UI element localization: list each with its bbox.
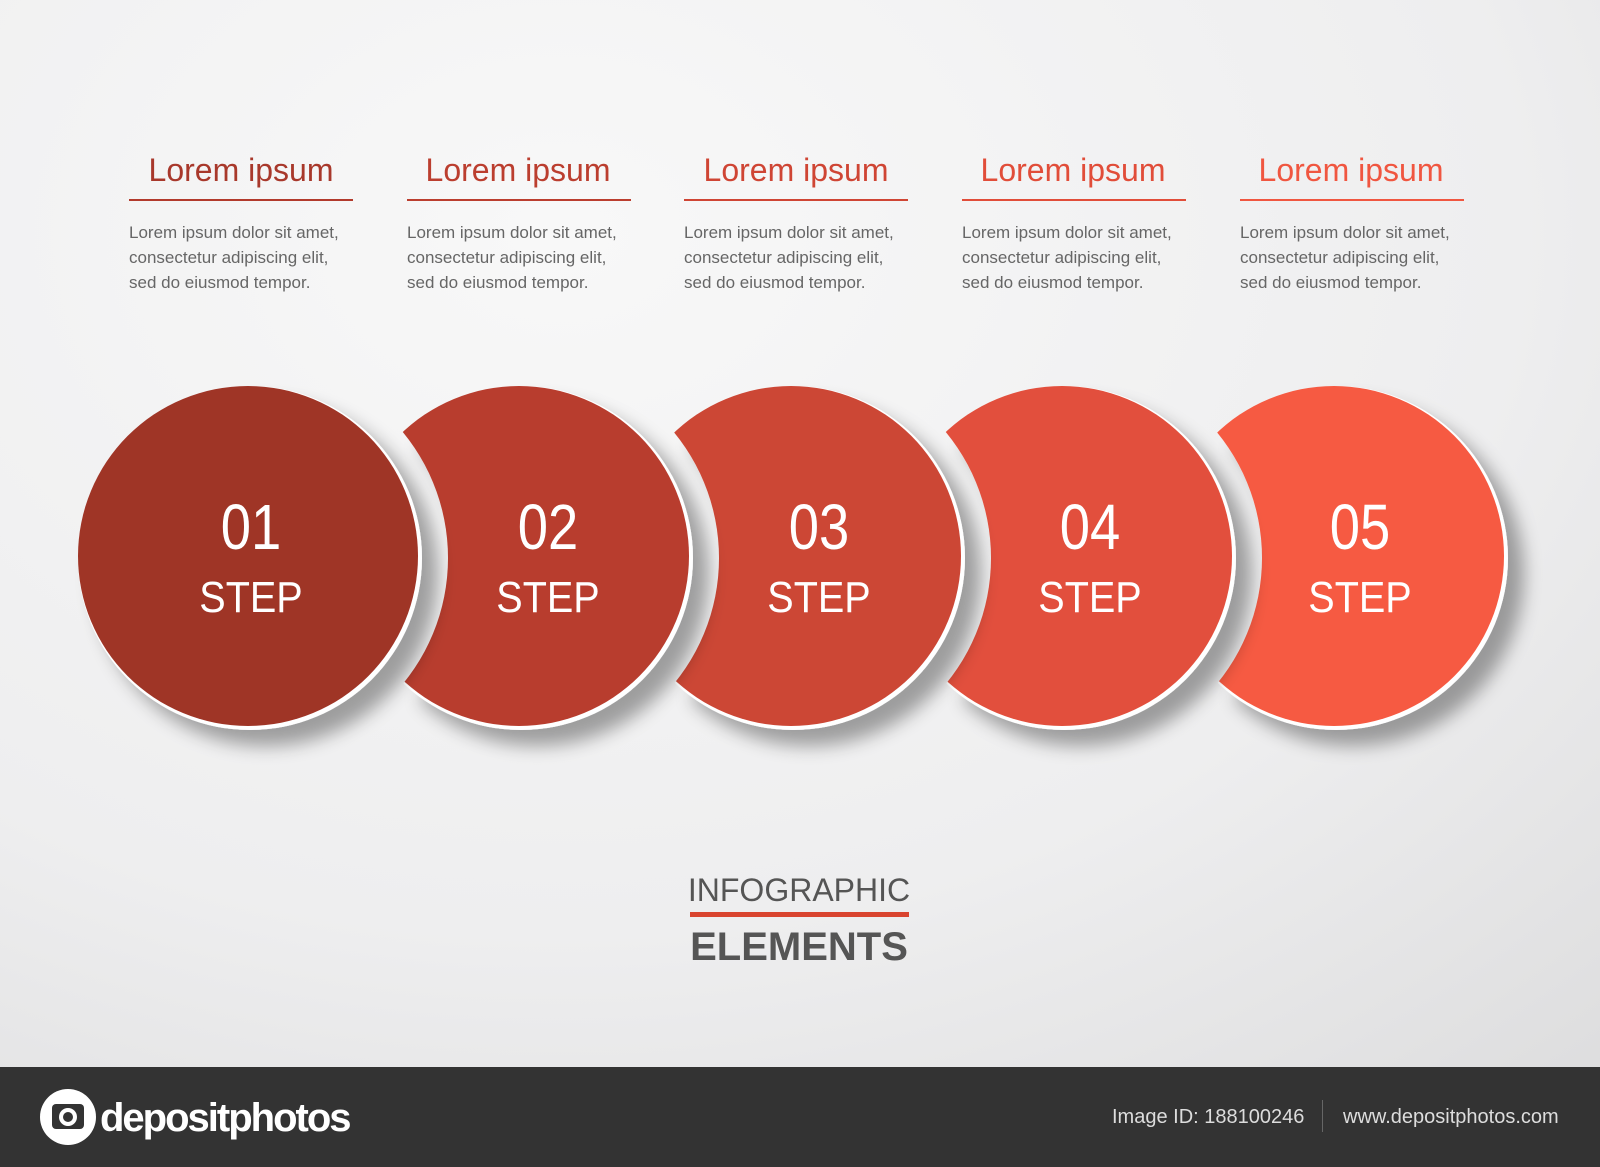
step 3 circle: 03 [789, 491, 849, 563]
column 1: consectetur adipiscing elit, [129, 248, 328, 267]
step 3 circle [621, 386, 965, 730]
column 5: Lorem ipsum dolor sit amet, [1240, 223, 1450, 242]
step 2 circle: STEP [496, 572, 600, 621]
column 3: Lorem ipsum dolor sit amet, [684, 223, 894, 242]
step 2 circle [349, 386, 693, 730]
column 5: consectetur adipiscing elit, [1240, 248, 1439, 267]
bottom bar: www.depositphotos.com [1342, 1106, 1559, 1128]
footer title [688, 872, 910, 969]
step 1 circle: STEP [199, 572, 303, 621]
step 5 circle [1164, 386, 1508, 730]
step 1 circle: 01 [221, 491, 281, 563]
column 4: Lorem ipsum [981, 152, 1165, 188]
column 1: Lorem ipsum dolor sit amet, [129, 223, 339, 242]
column 5: Lorem ipsum [1259, 152, 1443, 188]
icon: camera logo [40, 1089, 96, 1145]
step 1 circle [78, 386, 422, 730]
column 5: sed do eiusmod tempor. [1240, 273, 1421, 292]
column 4: sed do eiusmod tempor. [962, 273, 1143, 292]
column 4: consectetur adipiscing elit, [962, 248, 1161, 267]
column 1: sed do eiusmod tempor. [129, 273, 310, 292]
footer title: ELEMENTS [690, 925, 908, 969]
step 3 circle: STEP [767, 572, 871, 621]
column 2: sed do eiusmod tempor. [407, 273, 588, 292]
column 2: consectetur adipiscing elit, [407, 248, 606, 267]
column 4 [962, 152, 1186, 292]
column 3: consectetur adipiscing elit, [684, 248, 883, 267]
step 4 circle [892, 386, 1236, 730]
column 3: Lorem ipsum [704, 152, 888, 188]
bottom bar: Image ID: 188100246 [1112, 1106, 1304, 1128]
column 2 [407, 152, 631, 292]
footer title: INFOGRAPHIC [688, 872, 910, 908]
column 5 [1240, 152, 1464, 292]
step 4 circle: 04 [1060, 491, 1120, 563]
column 3: sed do eiusmod tempor. [684, 273, 865, 292]
column 4: Lorem ipsum dolor sit amet, [962, 223, 1172, 242]
column 3 [684, 152, 908, 292]
step 2 circle: 02 [518, 491, 578, 563]
bottom bar: depositphotos [100, 1096, 350, 1140]
step 5 circle: 05 [1330, 491, 1390, 563]
step 4 circle: STEP [1038, 572, 1142, 621]
column 1 [129, 152, 353, 292]
step 5 circle: STEP [1308, 572, 1412, 621]
column 1: Lorem ipsum [149, 152, 333, 188]
bottom bar [0, 1067, 1600, 1167]
column 2: Lorem ipsum dolor sit amet, [407, 223, 617, 242]
column 2: Lorem ipsum [426, 152, 610, 188]
